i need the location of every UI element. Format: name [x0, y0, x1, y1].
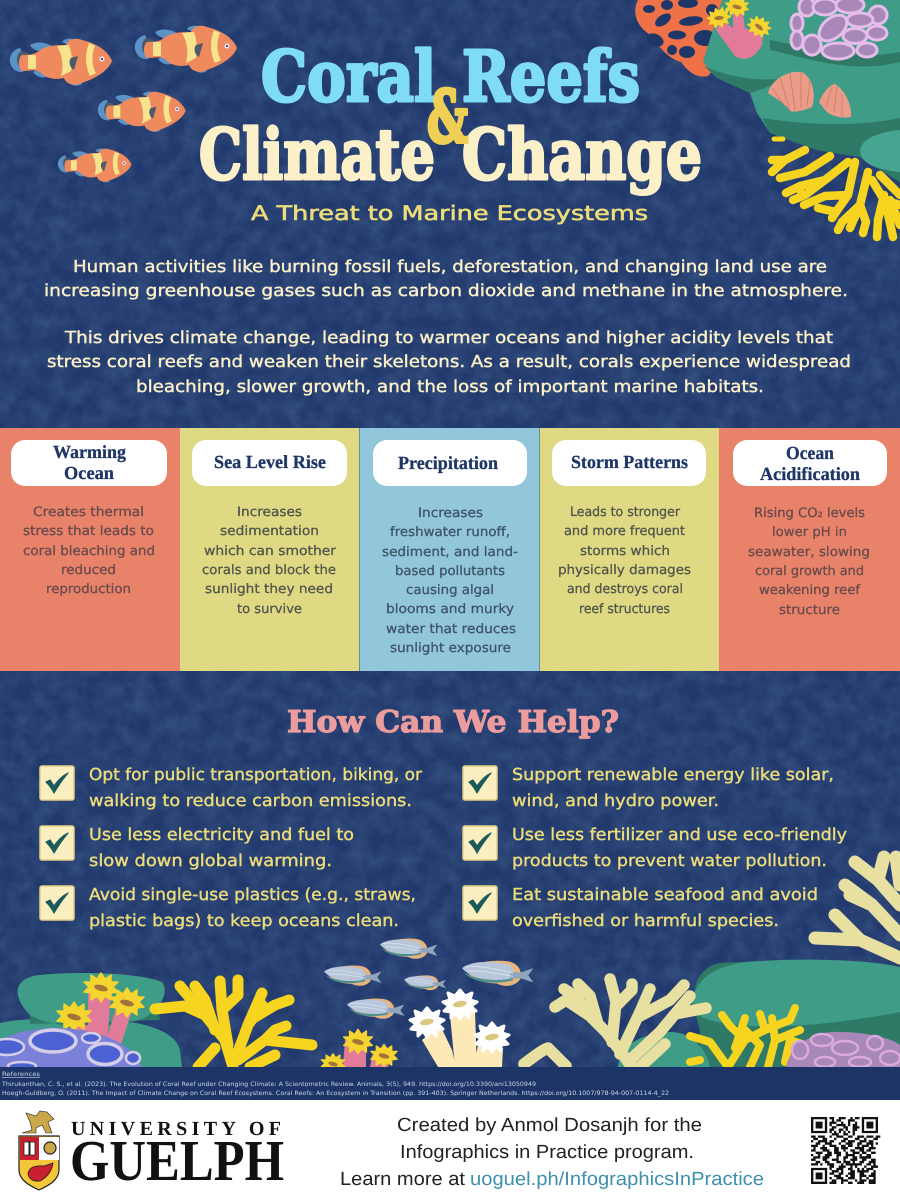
checkboxes: [40, 766, 497, 920]
panel: precipitation: causing algal: [406, 583, 494, 598]
intro text: bleaching, slower growth, and the loss of important marine habitats.: [136, 377, 764, 396]
references band: References: [2, 1071, 40, 1078]
title: Climate Change: Climate: [199, 113, 435, 196]
panel: storm patterns: Storm Patterns: [571, 453, 688, 473]
cream coral upper right: [815, 857, 900, 958]
panel: sea level rise: sunlight they need: [205, 582, 333, 597]
icon: fish 1: [380, 939, 437, 959]
panel: warming ocean: [0, 428, 180, 671]
panel: ocean acidification: weakening reef: [759, 583, 860, 598]
wordmark: UNIVERSITY OF: [71, 1118, 281, 1140]
credit text: Created by Anmol Dosanjh for the: [397, 1115, 702, 1136]
blue bubble coral: [0, 1028, 142, 1070]
references band: Hoegh-Guldberg, O. (2011). The Impact of Climate Change on Coral Reef Ecosystems. Coral Reefs: An Ecosystem in Transition (pp. 391-403). Springer Netherlands. https://doi.org/10.1007/978-94-007-0114-4_22: [2, 1090, 669, 1097]
icon: shield: [19, 1136, 59, 1190]
icon: fish 4: [347, 999, 404, 1019]
panel: sea level rise: which can smother: [204, 544, 337, 559]
checklist: actions: [40, 765, 847, 930]
title: Climate Change: Change: [462, 113, 702, 196]
panel: storm patterns: physically damages: [558, 563, 691, 578]
action text: right column: wind, and hydro power.: [512, 791, 719, 810]
title: Climate Change: [199, 113, 702, 196]
title: Coral Reefs: [261, 35, 640, 118]
pink tube coral: [705, 0, 774, 59]
credit text: [340, 1115, 764, 1190]
panel: precipitation: sediment, and land-: [382, 545, 518, 560]
references band: Thirukanthan, C. S., et al. (2023). The Evolution of Coral Reef under Changing Climate: A Scientometric Review. Animals, 3(5), 949. https://doi.org/10.3390/ani13050949: [1, 1081, 536, 1088]
action text: right column: Use less fertilizer and use eco-friendly: [512, 825, 847, 844]
teal rock centre: [618, 1032, 710, 1067]
title: Coral Reefs: Coral: [261, 35, 436, 118]
panel: storm patterns: [540, 428, 719, 671]
yellow branching coral: [155, 980, 312, 1067]
icon: clownfish 4: [58, 148, 131, 182]
panel: ocean acidification: Ocean: [786, 444, 835, 464]
action text: right column: Eat sustainable seafood and avoid: [512, 885, 818, 904]
panel: warming ocean: reduced: [61, 563, 116, 578]
illustration: reef floor: [0, 857, 900, 1074]
credit text: Learn more at: [340, 1169, 466, 1190]
panel: warming ocean: Warming: [53, 443, 127, 463]
credit text: Infographics in Practice program.: [400, 1142, 694, 1163]
panel: ocean acidification: Acidification: [760, 465, 861, 485]
action text: right column: products to prevent water pollution.: [512, 851, 827, 870]
title: Coral Reefs: Reefs: [462, 35, 640, 118]
yellow coral small: [690, 1008, 805, 1067]
action text: left column: walking to reduce carbon emissions.: [89, 791, 412, 810]
panel: warming ocean: coral bleaching and: [23, 544, 155, 559]
panel: precipitation: Increases: [418, 506, 483, 521]
action text: left column: Use less electricity and fuel to: [89, 825, 354, 844]
purple coral: [791, 0, 887, 59]
cream tube anemones: [410, 990, 509, 1067]
title: [199, 35, 702, 196]
action text: left column: [89, 765, 422, 930]
logo: University of Guelph: [19, 1111, 284, 1193]
panel: precipitation: sunlight exposure: [390, 641, 511, 656]
pink tube corals centre: [321, 1029, 397, 1074]
panel: ocean acidification: seawater, slowing: [748, 545, 870, 560]
panel: ocean acidification: coral growth and: [755, 564, 864, 579]
credit text: uoguel.ph/InfographicsInPractice: [470, 1169, 764, 1190]
panel: storm patterns: and destroys coral: [567, 582, 683, 597]
purple coral right: [786, 1032, 900, 1067]
intro text: increasing greenhouse gases such as carbon dioxide and methane in the atmosphere.: [44, 281, 848, 300]
panel: precipitation: [360, 428, 540, 671]
panel: precipitation: based pollutants: [395, 564, 505, 579]
green rocks: [703, 0, 900, 182]
panel: storm patterns: reef structures: [579, 602, 670, 617]
panel: sea level rise: Sea Level Rise: [214, 453, 326, 473]
action text: left column: plastic bags) to keep oceans clean.: [89, 911, 399, 930]
pink tube corals left: [57, 973, 144, 1047]
action text: left column: slow down global warming.: [89, 851, 332, 870]
school of grey fish: [324, 939, 533, 1019]
panel: impact columns: [0, 428, 900, 671]
intro text: [44, 257, 851, 396]
action text: left column: Opt for public transportation, biking, or: [89, 765, 422, 784]
panel: warming ocean: Creates thermal: [33, 505, 144, 520]
intro text: stress coral reefs and weaken their skeletons. As a result, corals experience widespread: [47, 352, 851, 371]
panel: sea level rise: corals and block the: [202, 563, 336, 578]
panel: ocean acidification: [719, 428, 900, 671]
panel: sea level rise: sedimentation: [220, 524, 319, 539]
panel: ocean acidification: structure: [779, 603, 840, 618]
panel: storm patterns: storms which: [580, 544, 670, 559]
icon: griffin: [22, 1111, 54, 1133]
panel: precipitation: freshwater runoff,: [390, 525, 510, 540]
panel: ocean acidification: Rising CO₂ levels: [754, 506, 865, 521]
subtitle: A Threat to Marine Ecosystems: [251, 201, 648, 225]
icon: clownfish 1: [10, 39, 112, 86]
panel: warming ocean: reproduction: [46, 582, 131, 597]
icon: fish 5: [462, 961, 533, 986]
yellow branching coral: [772, 139, 900, 237]
panel: storm patterns: Leads to stronger: [570, 505, 681, 520]
panel: sea level rise: to survive: [237, 602, 302, 617]
panel: precipitation: blooms and murky: [386, 602, 514, 617]
icon: clownfish 2: [135, 26, 237, 73]
title: ampersand: &: [427, 74, 468, 159]
references band: [0, 1067, 900, 1100]
intro text: This drives climate change, leading to warmer oceans and higher acidity levels that: [64, 328, 834, 347]
panel: warming ocean: Ocean: [64, 464, 115, 484]
green rock right: [692, 960, 900, 1067]
action text: right column: Support renewable energy like solar,: [512, 765, 834, 784]
cream branching coral: [524, 979, 706, 1067]
green rock left: [0, 973, 182, 1067]
panel: warming ocean: stress that leads to: [23, 524, 154, 539]
footer panel: [0, 1100, 900, 1200]
QR code: [811, 1117, 880, 1184]
clownfish school: [10, 26, 237, 182]
action text: right column: [512, 765, 847, 930]
icon: fish 2: [324, 966, 381, 986]
panel: ocean acidification: lower pH in: [772, 525, 847, 540]
logo: University of Guelph: GUELPH: [70, 1128, 284, 1193]
heading: how can we help: How Can We Help?: [287, 705, 619, 740]
intro text: Human activities like burning fossil fuels, deforestation, and changing land use are: [73, 257, 827, 276]
panel: precipitation: water that reduces: [386, 622, 516, 637]
icon: clownfish 3: [98, 92, 186, 132]
panel: storm patterns: and more frequent: [564, 524, 685, 539]
action text: left column: Avoid single-use plastics (e.g., straws,: [89, 885, 416, 904]
panel: precipitation: Precipitation: [398, 454, 499, 474]
icon: fish 3: [404, 975, 446, 990]
orange coral: [635, 0, 730, 77]
scallop shells: [768, 72, 851, 118]
panel: sea level rise: [180, 428, 360, 671]
action text: right column: overfished or harmful species.: [512, 911, 779, 930]
panel: sea level rise: Increases: [237, 505, 302, 520]
illustration: top right reef: [635, 0, 900, 237]
